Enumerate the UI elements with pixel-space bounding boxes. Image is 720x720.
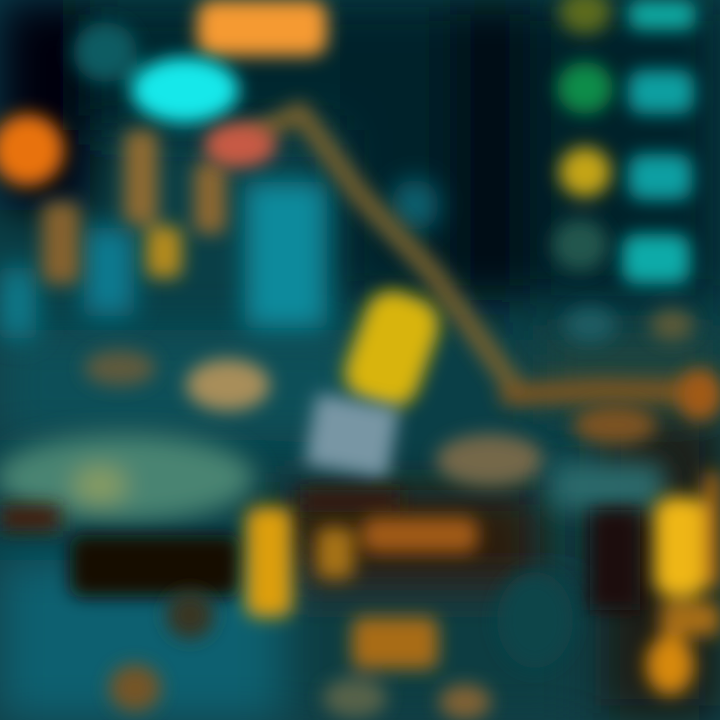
trend line [225, 112, 700, 395]
yellow tag [337, 282, 447, 416]
grey box [304, 393, 400, 479]
teal bar chart [0, 179, 439, 338]
dark lower band [0, 490, 640, 610]
orange bars [42, 130, 226, 284]
salmon marker [204, 123, 276, 167]
cyan bubble [73, 22, 239, 123]
left orange circle [0, 114, 64, 186]
right column icons [552, 0, 613, 271]
lower orange bars [246, 472, 720, 695]
bottom items [109, 572, 573, 720]
top orange card [197, 0, 327, 56]
middle items [84, 350, 720, 486]
right column labels [564, 0, 696, 343]
green table panel [0, 434, 665, 522]
